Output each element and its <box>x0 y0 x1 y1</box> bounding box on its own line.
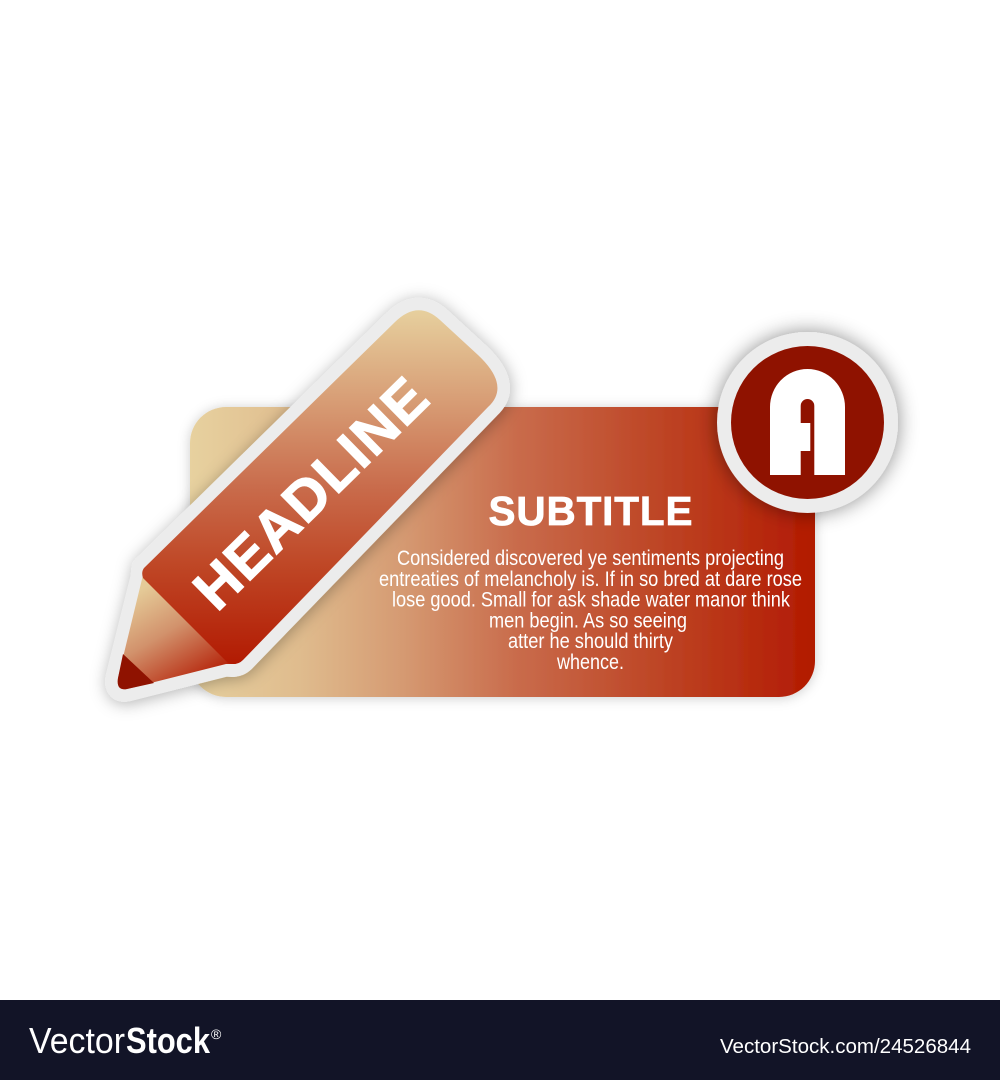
body text: lose good. Small for ask shade water manor think <box>392 588 790 612</box>
footer logo: Vector <box>29 1020 125 1061</box>
footer logo: ® <box>211 1026 222 1042</box>
pencil lead <box>118 654 154 689</box>
pencil outline border <box>118 310 497 689</box>
footer image id: VectorStock.com/24526844 <box>720 1036 971 1058</box>
icon: pencil with headline <box>118 310 497 689</box>
pencil body <box>142 310 497 664</box>
headline: HEADLINE <box>181 366 441 622</box>
body text: Considered discovered ye sentiments projecting <box>397 547 784 570</box>
footer logo <box>29 1020 222 1061</box>
body text: entreaties of melancholy is. If in so bred at dare rose <box>379 568 802 591</box>
body text: men begin. As so seeing <box>489 610 687 632</box>
body text: whence. <box>556 651 624 674</box>
subtitle: SUBTITLE <box>488 488 692 534</box>
icon: letter badge <box>717 332 898 513</box>
pencil wood tip <box>118 575 236 689</box>
body text <box>379 547 802 674</box>
footer bar <box>0 1000 1000 1080</box>
body text: atter he should thirty <box>508 630 673 653</box>
panel: subtitle card <box>190 407 815 697</box>
footer logo: Stock <box>126 1020 211 1061</box>
